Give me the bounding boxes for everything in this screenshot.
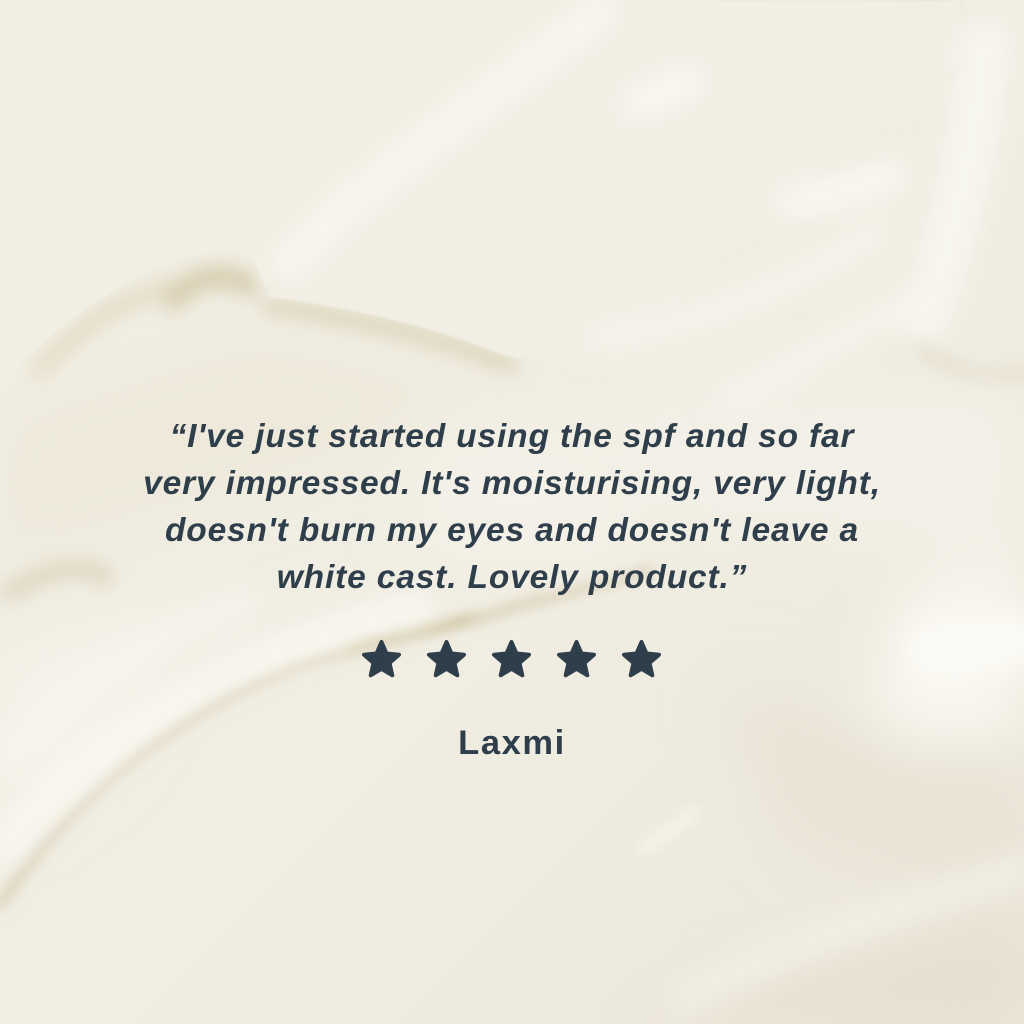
text block: testimonial quote xyxy=(143,418,881,596)
text block: testimonial quote: “I've just started using the spf and so far xyxy=(170,418,854,455)
text: reviewer name: Laxmi xyxy=(458,724,566,762)
large soft tonal areas xyxy=(0,340,1024,1024)
fold: upper sheets xyxy=(0,0,960,385)
lower swoosh shadow xyxy=(0,570,650,905)
text block: testimonial quote: doesn't burn my eyes and doesn't leave a xyxy=(165,512,859,549)
shadows cast by folds xyxy=(10,4,1024,592)
text block: testimonial quote: white cast. Lovely product.” xyxy=(277,559,747,596)
text block: testimonial quote: very impressed. It's moisturising, very light, xyxy=(143,465,881,502)
icon: five star rating xyxy=(362,640,661,678)
